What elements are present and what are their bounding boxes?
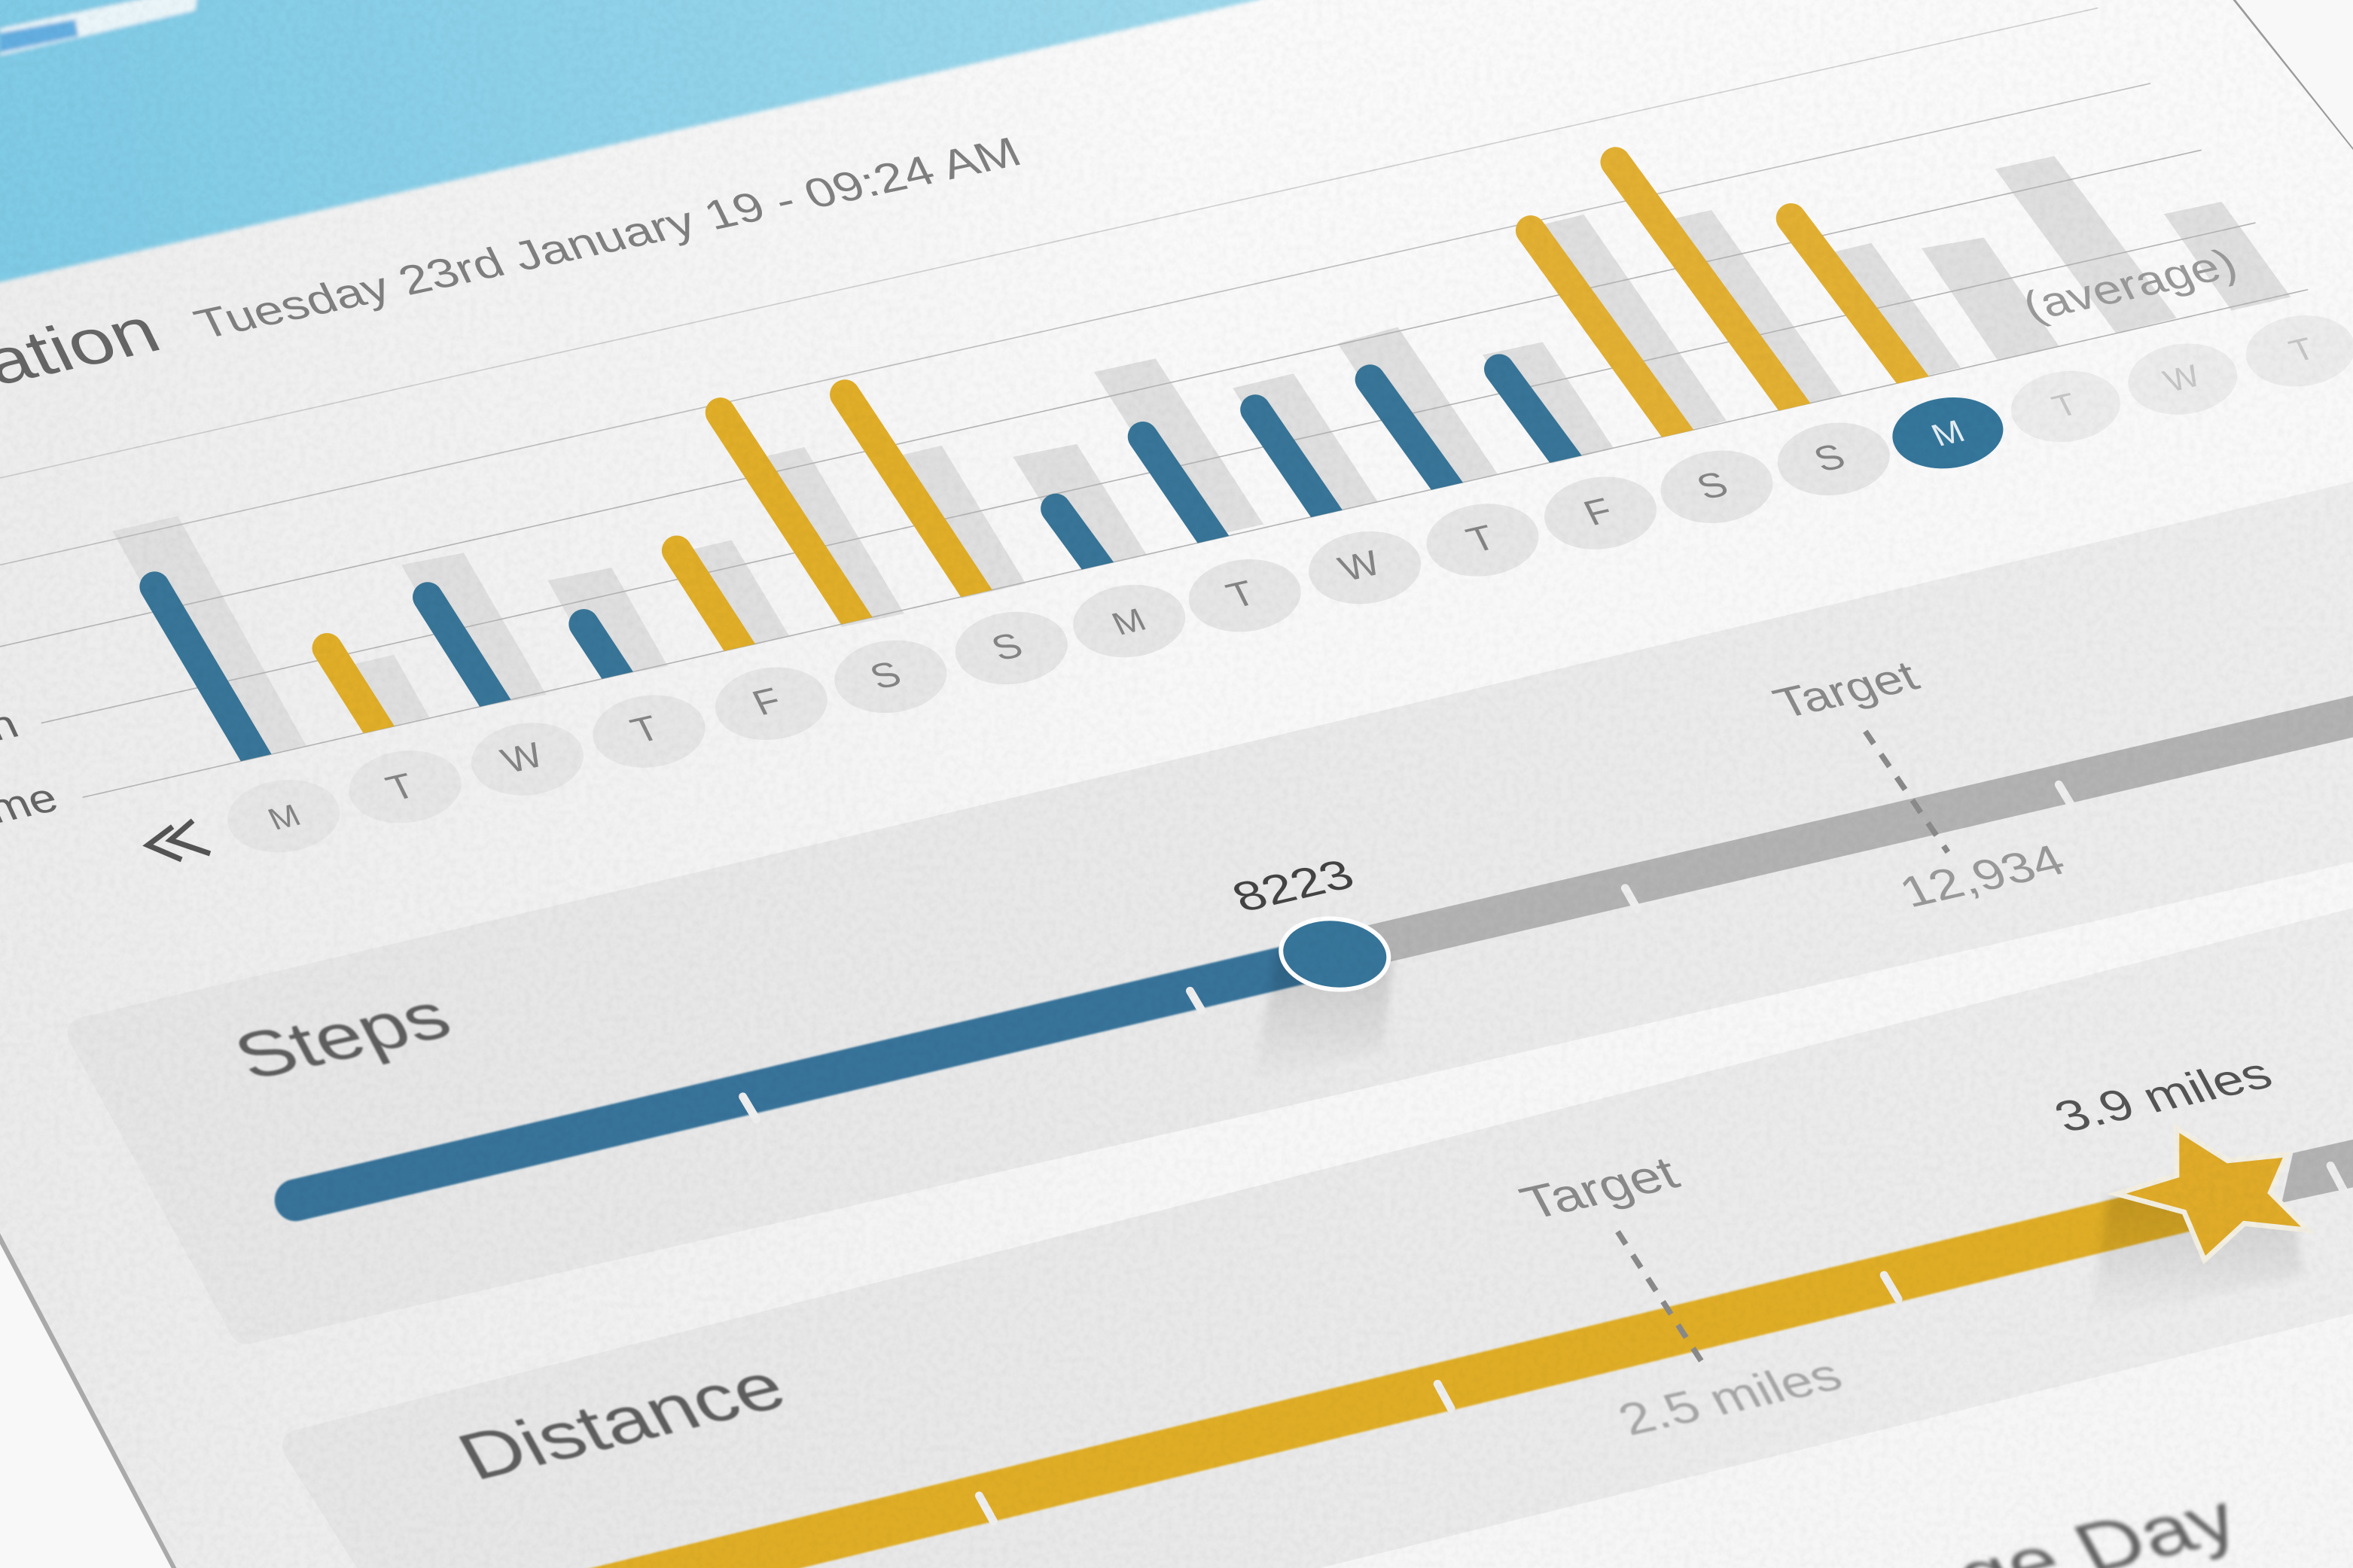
selected day letter: M xyxy=(1925,413,1970,453)
past day letters: S xyxy=(985,626,1029,668)
selected day circle xyxy=(1889,392,2007,473)
steps progress track xyxy=(296,955,1334,1200)
paper texture xyxy=(533,3,2287,1524)
past day circles xyxy=(224,417,1894,858)
steps remaining track xyxy=(1321,714,2353,957)
steps target marker xyxy=(1865,732,1948,852)
future day letters xyxy=(2047,330,2321,424)
past day letters: M xyxy=(263,799,306,836)
distance target label: Target xyxy=(1511,1146,1687,1229)
distance target value: 2.5 miles xyxy=(1609,1349,1851,1445)
future day letters: T xyxy=(2047,386,2083,424)
track ticks xyxy=(743,784,2072,1119)
past day letters: W xyxy=(495,735,550,781)
steps target value: 12,934 xyxy=(1891,836,2073,916)
past day letters: M xyxy=(1105,601,1152,642)
steps panel background xyxy=(84,495,2353,1328)
steps knob xyxy=(1278,913,1392,995)
card edge: upper right xyxy=(2233,0,2353,151)
chart grid lines xyxy=(0,8,2308,797)
past day letters: S xyxy=(1807,437,1852,480)
star shadow xyxy=(2089,1185,2303,1323)
card edge: lower left xyxy=(0,1230,177,1568)
average label: (average) xyxy=(2015,241,2245,330)
distance target marker xyxy=(1617,1232,1704,1366)
past day letters: T xyxy=(379,766,422,808)
date and time: Tuesday 23rd January 19 - 09:24 AM xyxy=(187,129,1029,348)
knob shadow xyxy=(1253,951,1392,1083)
past day letters: F xyxy=(1577,491,1620,533)
future day letters: T xyxy=(2284,330,2321,369)
past day letters: T xyxy=(1460,517,1502,560)
past day letters: S xyxy=(1690,464,1734,507)
distance heading: Distance xyxy=(445,1348,798,1494)
distance value: 3.9 miles xyxy=(2046,1049,2281,1142)
past day letters: W xyxy=(1332,543,1388,589)
distance progress track xyxy=(450,1200,2214,1568)
blue header band xyxy=(0,0,1291,285)
steps value: 8223 xyxy=(1224,851,1362,921)
daily value bars xyxy=(154,162,1924,771)
day selector xyxy=(224,310,2353,858)
bar chart xyxy=(0,8,2308,797)
header progress pill xyxy=(0,0,198,56)
future day circles xyxy=(2007,310,2353,447)
panel: distance xyxy=(299,921,2353,1568)
future day letters: W xyxy=(2157,358,2207,398)
icon: star marker xyxy=(2117,1128,2308,1260)
distance remaining track xyxy=(2281,1137,2353,1203)
distance panel background xyxy=(299,921,2353,1568)
steps target label: Target xyxy=(1766,652,1927,727)
past day letters: S xyxy=(864,654,907,696)
steps heading: Steps xyxy=(222,979,463,1094)
past day letters: F xyxy=(746,680,788,723)
icon: back chevrons xyxy=(148,821,210,860)
average bars xyxy=(112,156,2291,760)
panel: steps xyxy=(84,495,2353,1328)
track ticks xyxy=(979,1165,2344,1521)
past day letters: T xyxy=(1220,573,1262,616)
past day letters xyxy=(263,437,1852,836)
past day letters: T xyxy=(624,708,666,751)
